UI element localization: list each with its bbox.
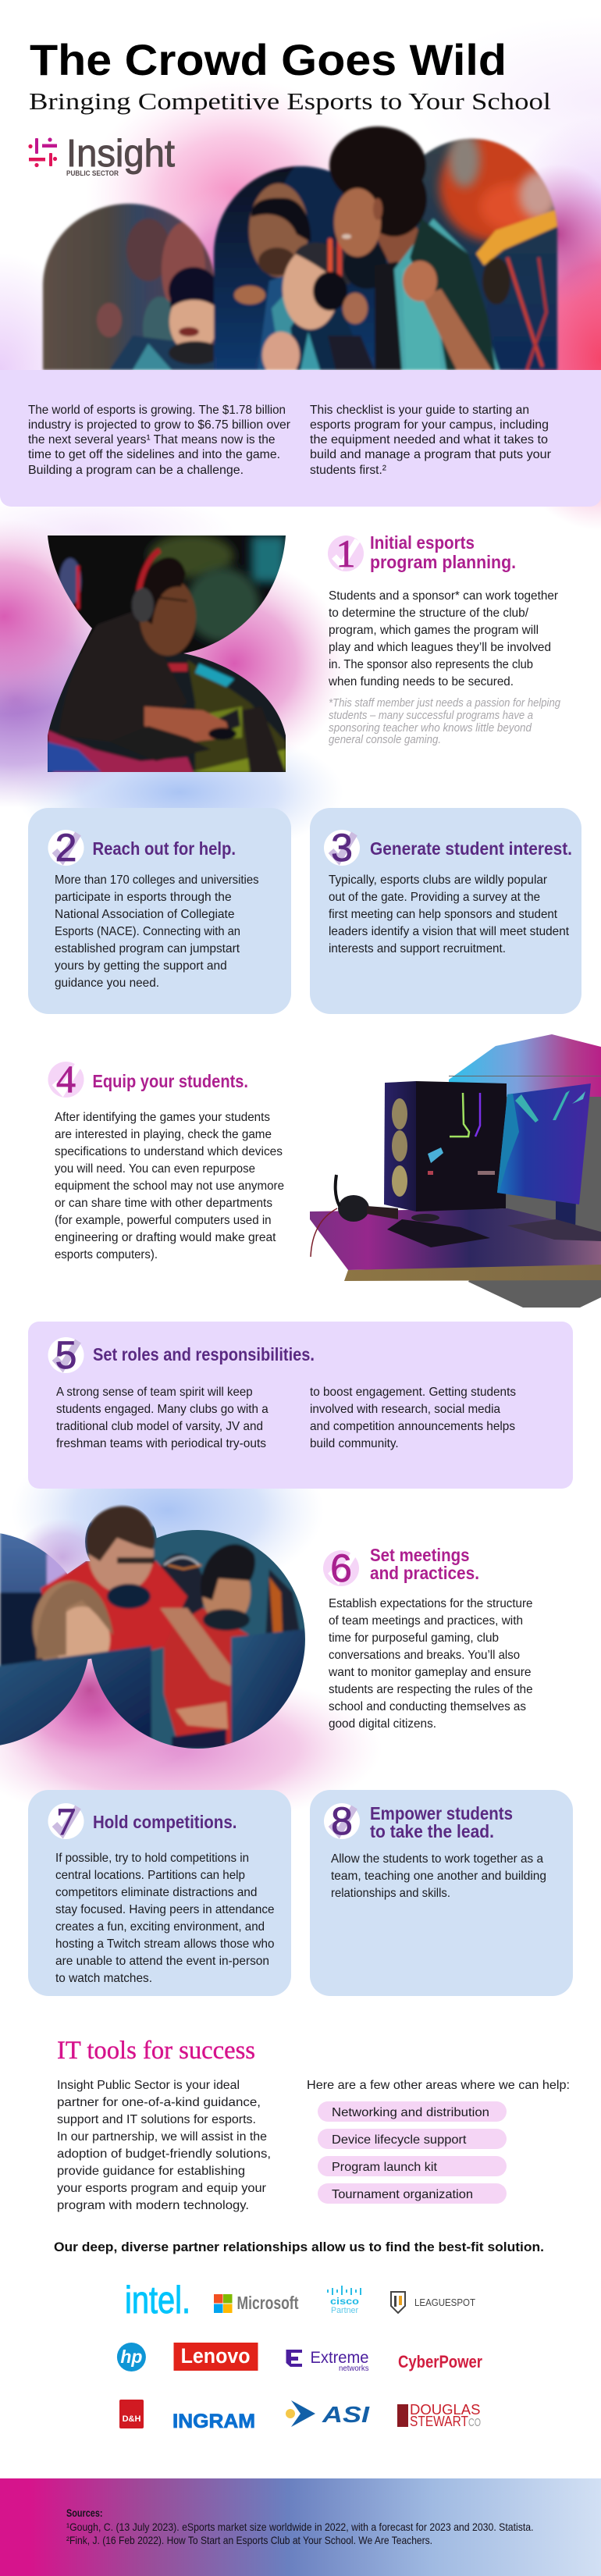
logo: Insight Public Sector	[28, 133, 175, 177]
footnote	[329, 696, 561, 746]
body text: right column: to boost engagement. Getting students	[310, 1386, 516, 1399]
body text: or can share time with other departments	[55, 1197, 272, 1210]
body text: when funding needs to be secured.	[328, 675, 514, 688]
icon: number 2	[48, 826, 84, 870]
body text: Insight Public Sector is your ideal	[57, 2079, 240, 2092]
body text: to determine the structure of the club/	[329, 607, 529, 620]
intro text: right column: students first.²	[310, 464, 387, 477]
body text: your esports program and equip your	[57, 2182, 267, 2195]
body text: Allow the students to work together as a	[331, 1852, 543, 1866]
body text: program with modern technology.	[57, 2199, 249, 2212]
body text: school and conducting themselves as	[329, 1700, 526, 1713]
panel: intro	[0, 370, 601, 507]
icon: number 1: 1	[336, 532, 356, 575]
body text: of team meetings and practices, with	[329, 1614, 523, 1628]
backdrop polygon: gradient top	[449, 1034, 601, 1097]
intro text: right column	[310, 404, 552, 477]
body text: in. The sponsor also represents the club	[329, 658, 533, 671]
body text: More than 170 colleges and universities	[55, 873, 259, 887]
panel: step 3	[310, 808, 581, 1014]
intro text: right column: build and manage a program that puts your	[310, 448, 552, 461]
body text: established program can jumpstart	[55, 942, 240, 955]
heading	[370, 1545, 479, 1583]
logo: The Douglas Stewart Co: CO	[468, 2416, 481, 2429]
background glow: step 6	[0, 1425, 382, 1827]
body text: right column: and competition announcements helps	[310, 1420, 515, 1433]
panel: step 4	[48, 1057, 284, 1261]
card background	[310, 808, 581, 1014]
icon: number 5: 5	[55, 1333, 76, 1377]
logo: The Douglas Stewart Co	[397, 2402, 481, 2429]
footer: sources band	[0, 2478, 601, 2576]
pill: device lifecycle: Device lifecycle support	[332, 2133, 467, 2147]
body text: esports computers).	[55, 1248, 158, 1261]
body text: program, which games the program will	[329, 624, 539, 637]
icon: number 4: 4	[56, 1057, 76, 1101]
body text: relationships and skills.	[331, 1887, 450, 1900]
photo arch: middle players	[211, 160, 390, 379]
body text: you will need. You can even repurpose	[55, 1162, 255, 1176]
icon: number 5	[48, 1333, 84, 1377]
icon: number 3	[324, 826, 360, 870]
body text: specifications to understand which devices	[55, 1145, 283, 1158]
logo: Lenovo: Lenovo	[181, 2344, 251, 2368]
card background	[28, 1790, 291, 1996]
intro text: right column: esports program for your campus, including	[310, 418, 549, 432]
section: IT tools for success	[57, 2037, 570, 2212]
heading	[370, 1803, 513, 1841]
partner statement: Our deep, diverse partner relationships allow us to find the best-fit solution.	[54, 2240, 544, 2254]
logo: The Douglas Stewart Co: STEWART	[410, 2414, 468, 2429]
body text: guidance you need.	[55, 977, 159, 990]
logo: CyberPower: CyberPower	[398, 2352, 482, 2371]
logo: Extreme Networks	[286, 2349, 368, 2373]
pill: networking: Networking and distribution	[332, 2106, 489, 2119]
photo arch: right background	[382, 125, 562, 375]
panel: step 7	[28, 1790, 291, 1996]
body text: creates a fun, exciting environment, and	[55, 1920, 265, 1934]
icon: number 7	[48, 1799, 84, 1843]
backdrop polygon: grey	[468, 1097, 601, 1308]
heading: Initial esports	[370, 532, 475, 553]
body text: play and which leagues they’ll be involved	[329, 641, 551, 654]
body text: are unable to attend the event in-person	[55, 1955, 269, 1968]
body text: to watch matches.	[55, 1972, 152, 1985]
logo: Extreme Networks: Extreme	[311, 2349, 368, 2367]
footnote: general console gaming.	[329, 733, 441, 746]
photo arch: left player	[41, 201, 217, 370]
logo: Cisco Partner: cisco	[330, 2296, 359, 2307]
heading: Set meetings	[370, 1545, 470, 1565]
body text: yours by getting the support and	[55, 959, 227, 973]
body text: left column: freshman teams with periodical try-outs	[56, 1437, 266, 1450]
photo: student gaming with headset	[43, 531, 293, 781]
body text: right column	[310, 1386, 516, 1450]
background glow: step 1	[0, 492, 347, 859]
intro text: left column: Building a program can be a challenge.	[28, 464, 244, 477]
icon: number 8	[324, 1799, 360, 1843]
heading: IT tools for success	[57, 2037, 255, 2065]
logo: LeagueSpot: LEAGUESPOT	[414, 2297, 475, 2308]
logo sub-line: PUBLIC SECTOR	[66, 169, 119, 177]
logo: Microsoft	[214, 2293, 299, 2313]
pill: device lifecycle	[318, 2129, 507, 2149]
logo: HP	[117, 2343, 146, 2371]
body text: competitors eliminate distractions and	[55, 1886, 258, 1899]
title: The Crowd Goes Wild	[30, 35, 507, 84]
body text: left column: students engaged. Many clubs go with a	[56, 1403, 268, 1416]
pill: tournament: Tournament organization	[332, 2188, 473, 2201]
hero photo: cheering esports team in arches	[39, 125, 562, 379]
body text: left column: A strong sense of team spirit will keep	[56, 1386, 253, 1399]
body text: Establish expectations for the structure	[329, 1597, 533, 1610]
body text: engineering or drafting would make great	[55, 1231, 276, 1244]
body text: (for example, powerful computers used in	[55, 1214, 272, 1227]
logo: HP: hp	[120, 2347, 142, 2367]
heading: Hold competitions.	[93, 1812, 236, 1832]
sources heading: Sources:	[66, 2507, 103, 2519]
icon: number 2: 2	[55, 826, 76, 870]
heading: program planning.	[370, 552, 516, 572]
logo: Intel: intel.	[125, 2279, 190, 2322]
source 2: ²Fink, J. (16 Feb 2022). How To Start an Esports Club at Your School. We Are Teachers.	[66, 2534, 432, 2546]
panel: step 5	[28, 1322, 573, 1489]
logo: ASI: ASI	[322, 2403, 370, 2428]
body text: want to monitor gameplay and ensure	[328, 1666, 532, 1679]
card background	[310, 1790, 573, 1996]
panel: step 1	[328, 532, 561, 746]
footnote: students – many successful programs have a	[329, 709, 533, 722]
photo: coach helping two student players	[0, 1506, 312, 1760]
body text: Students and a sponsor* can work together	[329, 589, 559, 603]
pill: launch kit: Program launch kit	[332, 2161, 438, 2174]
body text: After identifying the games your students	[55, 1111, 270, 1124]
logo: LeagueSpot	[391, 2292, 475, 2313]
body text: good digital citizens.	[329, 1717, 436, 1731]
list intro: Here are a few other areas where we can help:	[307, 2079, 570, 2092]
heading: Generate student interest.	[370, 838, 572, 859]
body text: time for purposeful gaming, club	[329, 1631, 499, 1645]
pill: launch kit	[318, 2156, 507, 2176]
icon: number 6: 6	[330, 1546, 352, 1590]
heading: Set roles and responsibilities.	[93, 1344, 315, 1364]
logo: Cisco Partner: Partner	[331, 2306, 358, 2315]
body text	[328, 589, 559, 688]
intro text: right column: This checklist is your guide to starting an	[310, 404, 529, 417]
headset	[311, 1175, 398, 1257]
logo: Extreme Networks: networks	[339, 2364, 368, 2373]
body text	[55, 1111, 284, 1261]
body text: right column: involved with research, social media	[310, 1403, 500, 1416]
body text: first meeting can help sponsors and student	[329, 908, 558, 921]
body text: partner for one-of-a-kind guidance,	[57, 2096, 261, 2109]
desk	[310, 1208, 601, 1281]
pill: tournament	[318, 2183, 507, 2204]
body text: conversations and breaks. You’ll also	[329, 1649, 520, 1662]
photo subject: woman with teal jersey	[329, 126, 510, 370]
logo: D&H	[119, 2400, 144, 2428]
logo: Ingram Micro: INGRAM	[172, 2411, 255, 2432]
body text: provide guidance for establishing	[57, 2165, 245, 2178]
panel: step 6	[323, 1545, 533, 1731]
icon: number 8: 8	[331, 1799, 353, 1843]
body text	[328, 1597, 533, 1731]
body text: participate in esports through the	[55, 891, 232, 904]
body text	[55, 873, 259, 990]
keyboard and mouse	[387, 1214, 490, 1247]
body text: Esports (NACE). Connecting with an	[55, 925, 240, 938]
logo wordmark: Insight	[66, 133, 175, 175]
card background	[28, 1322, 573, 1489]
body text: students are respecting the rules of the	[329, 1683, 533, 1696]
intro text: left column: The world of esports is growing. The $1.78 billion	[28, 404, 286, 417]
pill: networking	[318, 2101, 507, 2122]
intro text: left column	[28, 404, 291, 477]
body text: support and IT solutions for esports.	[57, 2113, 256, 2126]
body text: left column	[56, 1386, 268, 1450]
body text: stay focused. Having peers in attendance	[55, 1903, 275, 1916]
body text: Typically, esports clubs are wildly popular	[329, 873, 548, 887]
body text: hosting a Twitch stream allows those who	[55, 1937, 275, 1951]
heading: Empower students	[370, 1803, 513, 1823]
logo: Cisco Partner	[327, 2286, 361, 2315]
icon: number 3: 3	[331, 826, 353, 870]
body text: out of the gate. Providing a survey at the	[329, 891, 540, 904]
body text: National Association of Collegiate	[55, 908, 235, 921]
intro text: left column: the next several years¹ That means now is the	[28, 433, 276, 447]
intro text: right column: the equipment needed and what it takes to	[310, 433, 548, 447]
body text: interests and support recruitment.	[329, 942, 506, 955]
panel: step 8	[310, 1790, 573, 1996]
subtitle: Bringing Competitive Esports to Your School	[29, 87, 551, 115]
footnote: *This staff member just needs a passion for helping	[329, 696, 561, 710]
heading: and practices.	[370, 1563, 479, 1583]
body text	[55, 1852, 275, 1985]
body text: In our partnership, we will assist in the	[57, 2130, 267, 2144]
body text: central locations. Partitions can help	[55, 1869, 245, 1882]
logo: ASI	[286, 2400, 370, 2428]
body text: equipment the school may not use anymore	[55, 1179, 284, 1193]
body text	[331, 1852, 546, 1900]
partner logos	[117, 2279, 482, 2432]
icon: number 7: 7	[56, 1799, 76, 1843]
heading: Reach out for help.	[92, 838, 236, 859]
body text: If possible, try to hold competitions in	[55, 1852, 249, 1865]
illustration: gaming PC setup on desk	[310, 1034, 601, 1308]
monitor	[497, 1083, 601, 1241]
icon: number 6	[323, 1546, 359, 1590]
footnote: sponsoring teacher who knows little beyond	[329, 721, 532, 735]
panel background	[0, 370, 601, 507]
source 1: ¹Gough, C. (13 July 2023). eSports market size worldwide in 2022, with a forecast for 2023 and 2030. Statista.	[66, 2521, 534, 2533]
logo: The Douglas Stewart Co: DOUGLAS	[410, 2402, 481, 2418]
heading: Equip your students.	[92, 1071, 248, 1091]
footer background	[0, 2478, 601, 2576]
body text: team, teaching one another and building	[331, 1870, 546, 1883]
panel: step 2	[28, 808, 291, 1014]
body text: right column: build community.	[310, 1437, 399, 1450]
icon: Insight mark	[28, 137, 57, 167]
body text: left column: traditional club model of varsity, JV and	[56, 1420, 263, 1433]
logo: D&H: D&H	[123, 2414, 140, 2424]
icon: number 1	[328, 532, 364, 575]
card background	[28, 808, 291, 1014]
body text: are interested in playing, check the game	[55, 1128, 272, 1141]
body text: leaders identify a vision that will meet student	[329, 925, 570, 938]
PC tower	[384, 1081, 507, 1212]
logo: Microsoft: Microsoft	[237, 2293, 299, 2313]
icon: number 4	[48, 1057, 84, 1101]
body text: adoption of budget-friendly solutions,	[57, 2147, 271, 2161]
body text	[57, 2079, 271, 2212]
body text	[329, 873, 570, 955]
heading: to take the lead.	[370, 1821, 494, 1841]
background glow: header	[0, 16, 601, 531]
intro text: left column: time to get off the sidelines and into the game.	[28, 448, 280, 461]
heading	[370, 532, 516, 572]
intro text: left column: industry is projected to grow to $6.75 billion over	[28, 418, 291, 432]
